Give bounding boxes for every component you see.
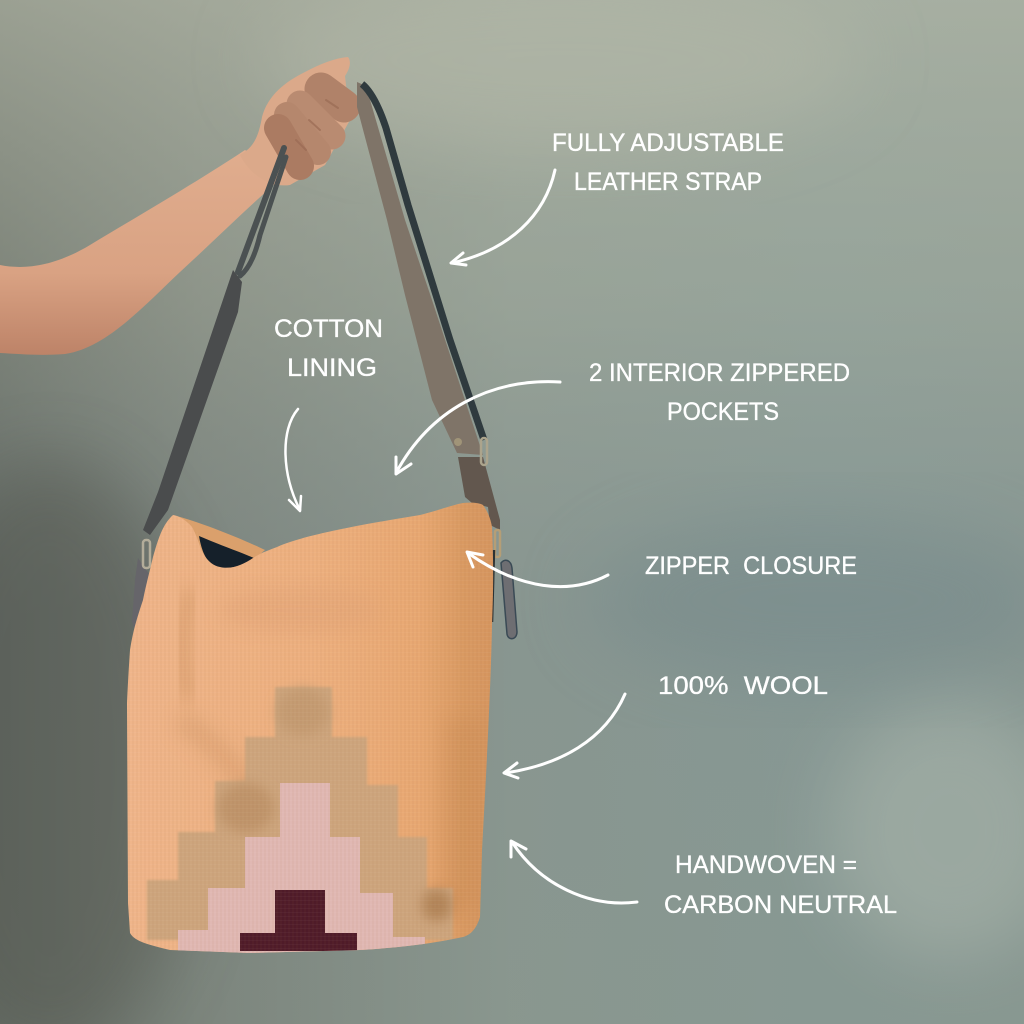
label: cotton lining: COTTON (274, 315, 383, 343)
strap: right wide section (357, 82, 483, 455)
strap: left tab (132, 558, 149, 630)
diamond pattern: tan stepped figure (147, 687, 453, 940)
bag back panel (173, 515, 265, 572)
strap: closure ring (495, 530, 500, 557)
arrow: to interior pockets (396, 382, 560, 474)
arm (0, 150, 285, 355)
arm and hand (0, 57, 350, 355)
strap: side edge (492, 550, 494, 622)
diamond pattern: maroon core (240, 890, 357, 951)
label: handwoven carbon neutral: HANDWOVEN = (675, 851, 857, 879)
label: handwoven carbon neutral: CARBON NEUTRAL (664, 891, 897, 919)
label: 2 interior zippered pockets: POCKETS (667, 398, 779, 426)
fingers (278, 89, 344, 166)
palm (240, 57, 350, 185)
label: handwoven carbon neutral (664, 851, 897, 919)
arrow: to zipper closure (467, 552, 608, 587)
strap: right dark edge (362, 84, 484, 440)
label: 100% wool: 100% WOOL (658, 672, 828, 700)
label: cotton lining (274, 315, 383, 382)
label: zipper closure: ZIPPER CLOSURE (645, 552, 857, 580)
bag body (127, 503, 493, 953)
arrow: to wool (504, 694, 625, 778)
strap: left long section (143, 270, 242, 535)
arrow: to leather strap (451, 170, 555, 265)
label: 2 interior zippered pockets: 2 INTERIOR ZIPPERED (589, 359, 850, 387)
diamond pattern: darker tan blocks (277, 688, 329, 736)
label: fully adjustable leather strap (552, 129, 784, 196)
label: 2 interior zippered pockets (589, 359, 850, 426)
strap: right hanging tab (501, 560, 517, 639)
bag opening (199, 536, 254, 568)
label: fully adjustable leather strap: LEATHER STRAP (574, 168, 762, 196)
strap: right lower section (458, 457, 500, 530)
weave texture (240, 892, 357, 949)
diamond pattern: pink stepped figure (178, 783, 425, 955)
strap: doubled section below the hand (238, 148, 284, 272)
strap: rivet (454, 438, 462, 446)
strap: right buckle (481, 438, 487, 465)
leather strap (132, 82, 517, 639)
woven wool bag (120, 500, 500, 960)
arrow: to handwoven (511, 841, 637, 903)
label: fully adjustable leather strap: FULLY ADJUSTABLE (552, 129, 784, 157)
fabric shading (182, 590, 192, 700)
arrow: to cotton lining (285, 409, 301, 511)
strap: left buckle (143, 540, 150, 568)
label: cotton lining: LINING (287, 354, 377, 382)
